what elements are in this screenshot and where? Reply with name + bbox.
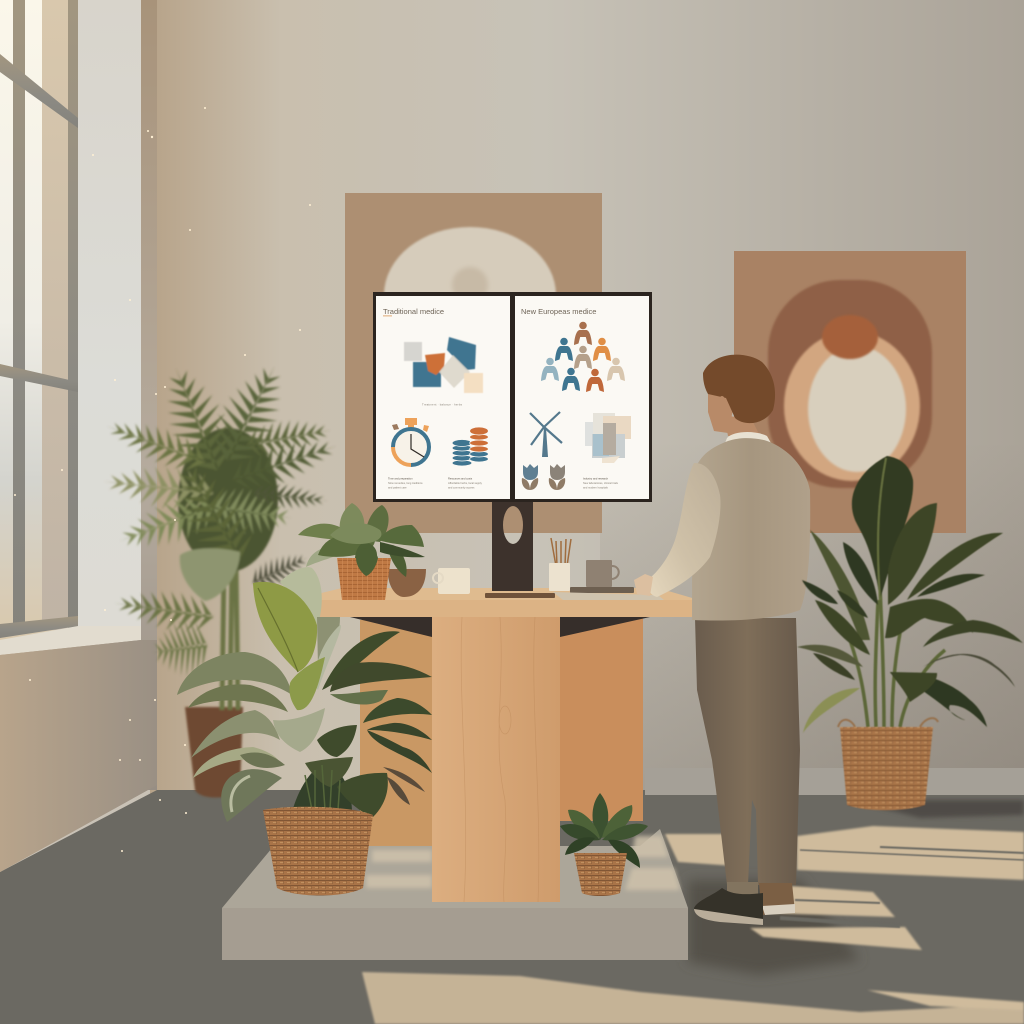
monitor stand [492,502,533,591]
plinth top [222,829,688,908]
stopwatch icon [392,418,429,465]
wall poster 1 [345,193,602,533]
bowl [388,569,426,597]
white mug [433,568,470,594]
concrete plinth [222,829,688,960]
front plant back leaves [280,567,340,668]
left caption two: and community access [448,486,475,490]
window reveal shadow [141,0,157,790]
ear [718,396,726,410]
grey mug [586,560,619,587]
coin stacks icon [452,427,488,466]
left caption one: Time and preparation [388,476,413,480]
right back panel [558,617,643,821]
window panes [0,0,78,640]
window [0,0,78,640]
sweater arm [648,463,721,597]
sweater body [692,438,810,621]
back left basket [185,707,243,798]
left caption two: Resources and costs [448,476,473,480]
poster centre [808,346,906,472]
desk plant [298,503,425,600]
right caption: and modern hospitals [583,486,609,490]
abstract squares [404,337,483,393]
windmill icon [530,412,562,457]
plinth lit bands [366,836,680,890]
floor shadow stripes [780,847,1024,926]
front plant stem shadow [292,762,352,812]
poster sun [822,315,878,359]
person [634,355,810,925]
front plant left leaves [177,652,292,822]
floor shadow near plinth and person [688,880,860,975]
pencil cup [549,538,571,591]
palm broad leaf [180,548,240,601]
face [708,385,733,433]
collar [725,432,771,443]
left caption one: Slow remedies, long traditions [388,481,423,485]
right caption [583,476,619,490]
right plant leaves [797,456,1023,733]
front desk plant leaf [356,549,378,576]
small plant leaves [560,793,648,868]
back wall [150,0,1024,800]
floor sunlight patches [362,826,1024,1024]
window sill [0,626,141,655]
right screen title: New Europeas medice [521,307,596,316]
monitor [373,292,652,502]
squares caption: Treatment · balance · herbs [422,402,463,406]
palm fronds [100,353,343,681]
neck [724,415,760,436]
wall poster 2 [734,251,966,533]
right floor plant [797,456,1023,810]
front shoe [694,888,763,920]
back left palm plant [100,353,343,798]
left side wall [0,0,157,872]
front plant right leaves [315,625,432,805]
wall shading [600,0,1024,800]
monitor frame [373,292,652,502]
right plant midrib [878,458,886,600]
right screen [515,296,649,499]
desk top surface [293,588,699,600]
socks [727,882,758,896]
left caption one: and patient care [388,486,407,490]
palm dark centre [178,428,278,572]
window reveal wall [78,0,141,630]
wall below window [0,640,157,872]
window frame bars [0,0,78,638]
left screen title: Traditional medice [383,307,444,316]
poster arch [384,227,556,363]
title rule [383,314,392,317]
left caption one [388,476,423,490]
front left plant [177,567,432,896]
left caption two: Affordable herbs, local supply [448,481,483,485]
desk column [432,617,560,902]
wood grain [461,617,539,902]
desk tablet and notebook [485,587,664,600]
poster ring [784,331,920,481]
left screen [376,296,510,499]
plinth front [222,908,688,960]
right caption: Industry and research [583,476,609,480]
desk plant leaves [298,503,425,577]
front plant yellow leaf [253,582,317,672]
tulip icons [522,464,565,490]
hair [703,355,775,423]
left caption two [448,476,483,490]
left back panel [360,620,435,847]
floor [0,790,1024,1024]
trousers [695,618,800,885]
front plant basket [263,807,373,896]
desk top [293,588,699,617]
front plant centre leaves [273,657,388,817]
people pyramid [541,322,625,392]
small plinth plant [560,793,648,896]
baseboard [645,768,1024,795]
basket floor shadow [850,800,1024,818]
overlapping panels [585,413,631,463]
palm stems [222,560,238,710]
back shoe [759,883,795,915]
small plant pot [574,853,627,896]
hand [634,574,653,596]
desk back panels [360,617,643,847]
right plant stems [850,540,945,727]
right plant basket [838,718,938,810]
brick view [42,0,70,630]
right caption: New laboratories, clinical trials [583,481,619,485]
poster outer shape [768,280,932,488]
desk plant pot [337,558,391,600]
dust motes [14,107,311,852]
desk brackets [350,617,650,637]
desk front edge [293,600,699,617]
